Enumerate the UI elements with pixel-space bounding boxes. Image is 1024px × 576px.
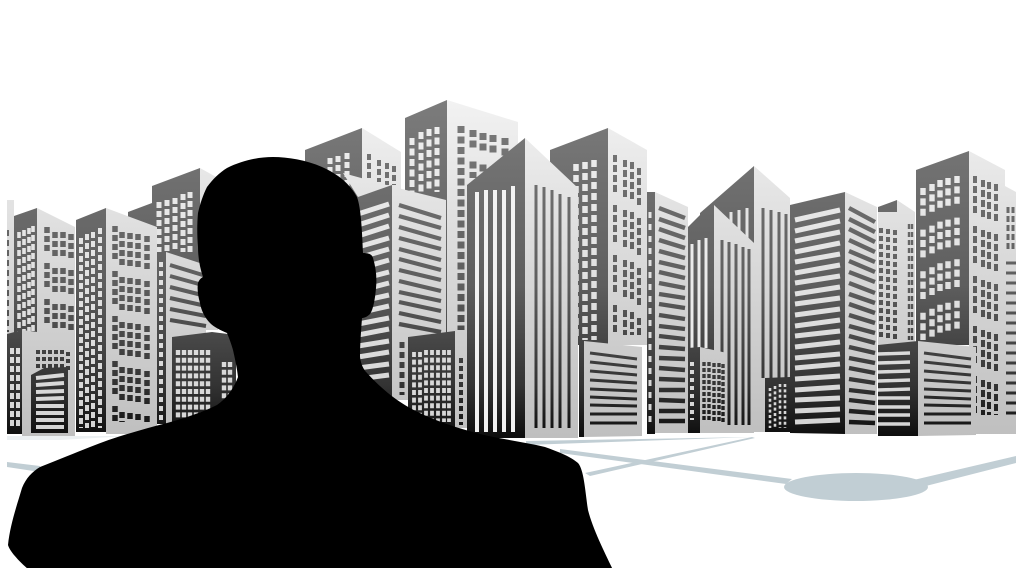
back right tower [878, 200, 915, 345]
far left sliver building [7, 200, 14, 334]
skyline [7, 100, 1016, 438]
striped building right of head [343, 173, 446, 400]
narrow striped tower [647, 192, 688, 434]
low striped building [579, 341, 642, 437]
front spire tower [688, 205, 754, 433]
right back tower beside spire [550, 128, 647, 345]
plaza circle [784, 473, 928, 501]
ground with street lines [7, 436, 1016, 501]
street lines [7, 436, 1016, 488]
mid-left striped building [157, 252, 206, 424]
small building center [408, 331, 467, 428]
small building in front of spire [690, 347, 725, 433]
back spire tower [700, 166, 790, 432]
left tower [14, 208, 75, 340]
back tower center left [305, 128, 401, 200]
small building left of shoulder [172, 332, 236, 424]
low building right [878, 341, 976, 436]
wide striped tower [790, 192, 877, 434]
small dark building [765, 377, 790, 432]
central spire tower [467, 138, 578, 438]
low building lower left [7, 330, 75, 436]
tower behind left of head [128, 168, 218, 330]
far right tower [916, 151, 1016, 434]
tall left front tower [76, 208, 157, 434]
person silhouette [8, 157, 613, 570]
tall back tower [405, 100, 518, 340]
inner small building [31, 367, 68, 433]
